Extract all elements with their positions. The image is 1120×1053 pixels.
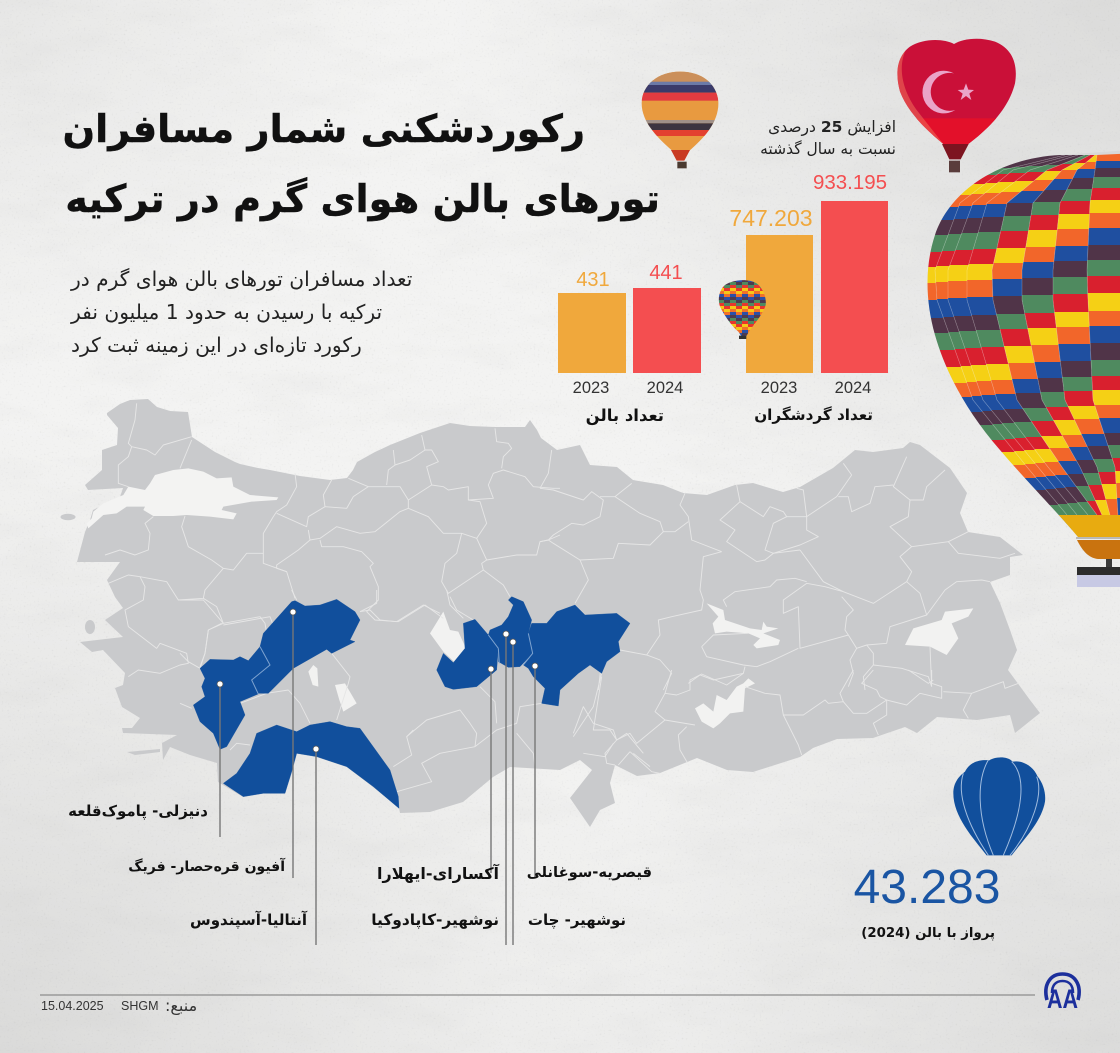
annotation: 25 percent increase: نسبت به سال گذشته <box>760 140 896 158</box>
intro paragraph: رکورد تازه‌ای در این زمینه ثبت کرد <box>71 333 362 357</box>
stat caption: پرواز با بالن (2024) <box>861 926 995 941</box>
chart label: balloons: تعداد بالن <box>586 406 664 425</box>
leader lines and pins <box>217 609 538 945</box>
small checkered balloon on bar <box>719 280 766 339</box>
icon: blue balloon <box>953 757 1045 855</box>
stat: flights: 43.283 <box>854 861 1000 914</box>
label: Nevsehir Cat: نوشهیر- چات <box>528 911 626 929</box>
intro paragraph: تعداد مسافران تورهای بالن هوای گرم در <box>71 267 412 291</box>
year 2024 tourists: 2024 <box>835 379 871 397</box>
annotation: 25 percent increase: افزایش 25 درصدی <box>768 118 896 136</box>
footer: source and date: 15.04.2025 <box>41 999 104 1013</box>
footer: source and date <box>41 996 197 1015</box>
value: 933.195: 933.195 <box>813 171 887 194</box>
province: Aksaray <box>437 619 498 689</box>
logo: Anadolu Agency <box>1046 974 1079 1014</box>
intro paragraph <box>70 267 412 357</box>
icon: crescent <box>922 71 955 113</box>
bar chart: balloon count <box>558 288 701 373</box>
title line two: تورهای بالن هوای گرم در ترکیه <box>65 177 660 222</box>
province: Antalya <box>223 722 399 808</box>
footer rule <box>40 994 1035 996</box>
map: islands <box>60 514 160 755</box>
bar chart: tourist count <box>746 201 888 373</box>
chart label: tourists: تعداد گردشگران <box>754 406 873 424</box>
heart balloon with Turkish flag <box>893 37 1020 172</box>
label: Aksaray: آکسارای-ایهلارا <box>377 864 499 883</box>
footer: source and date: SHGM <box>121 999 158 1013</box>
label: Denizli: دنیزلی- پاموک‌قلعه <box>68 802 208 820</box>
label: Antalya: آنتالیا-آسپندوس <box>190 911 307 929</box>
label: Afyon: آفیون قره‌حصار- فریگ <box>128 859 285 875</box>
orange striped balloon <box>640 70 720 168</box>
footer: source and date: منبع: <box>165 996 197 1015</box>
value: 431: 431 <box>576 269 610 291</box>
province: Nevsehir <box>488 597 533 667</box>
icon: star <box>958 83 974 100</box>
intro paragraph: ترکیه با رسیدن به حدود 1 میلیون نفر <box>71 300 382 324</box>
year 2023 balloons: 2023 <box>573 379 609 397</box>
year 2023 tourists: 2023 <box>761 379 797 397</box>
large multicoloured balloon <box>928 151 1120 587</box>
label: Nevsehir Cappadocia: نوشهیر-کاپادوکیا <box>371 911 499 929</box>
title: رکوردشکنی شمار مسافران <box>62 107 585 152</box>
annotation: 25 percent increase <box>760 118 896 158</box>
year 2024 balloons: 2024 <box>647 379 683 397</box>
value: 747.203: 747.203 <box>729 205 813 231</box>
map of Turkey <box>60 399 1040 827</box>
value: 441: 441 <box>649 262 683 284</box>
map: land silhouette <box>77 399 1040 827</box>
province: Kayseri <box>523 605 630 706</box>
map: seas and lakes <box>87 468 278 528</box>
province: Afyon <box>252 599 360 693</box>
label: Kayseri: قیصریه-سوغانلی <box>527 864 652 881</box>
map: province borders <box>105 403 1018 792</box>
province: Denizli <box>193 647 270 749</box>
logo: Anadolu Agency: AA <box>1047 984 1078 1014</box>
map: highlighted provinces <box>193 597 630 808</box>
map: province seams inside the blue area <box>252 633 533 694</box>
